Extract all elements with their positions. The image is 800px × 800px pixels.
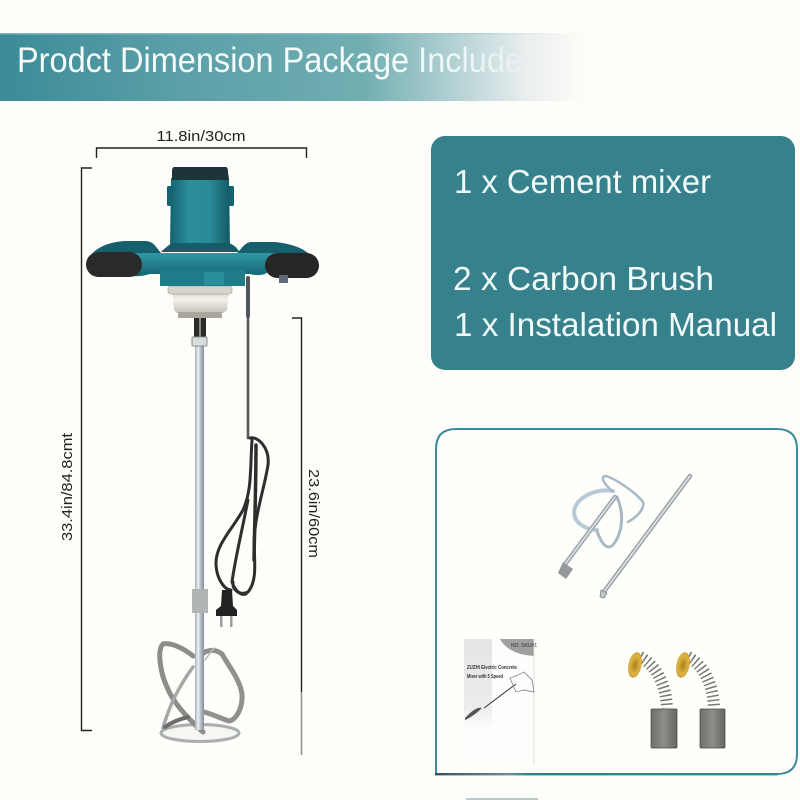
dimension: total height: 33.4in/84.8cmt [59, 432, 76, 541]
icon: instruction manual [464, 639, 537, 765]
panel: package list [431, 136, 795, 370]
lower collar [160, 270, 245, 286]
icon: instruction manual: ZUZHI Electric Concrete [467, 665, 517, 671]
icon: instruction manual: NO. SKU#1 [511, 643, 537, 649]
right handle [237, 242, 319, 283]
icon: instruction manual: Mixer with 5 Speed [467, 674, 503, 680]
icon: mixing paddle and shaft [558, 476, 690, 598]
steel shaft [192, 345, 208, 730]
dimension: shaft height [292, 318, 322, 755]
power cord [216, 278, 268, 594]
panel: included accessories [435, 429, 797, 775]
plug [216, 590, 237, 627]
motor housing [161, 167, 240, 252]
list item: cement mixer: 1 x Cement mixer [454, 164, 711, 201]
bottom edge strip [466, 798, 538, 800]
dimension: shaft height: 23.6in/60cm [305, 469, 322, 558]
title: Prodct Dimension Package Include [17, 41, 523, 80]
icon: carbon brush 2 [674, 651, 725, 748]
icon: carbon brush 1 [626, 651, 677, 748]
cement mixer product photo [86, 167, 319, 742]
dimension: width [96, 128, 306, 158]
dimension: width: 11.8in/30cm [156, 128, 246, 145]
mixing paddle [160, 644, 242, 742]
dimension: total height [59, 168, 92, 730]
chuck and gearbox [168, 286, 232, 346]
heading banner [0, 33, 585, 101]
left handle [86, 241, 275, 277]
list item: manual: 1 x Instalation Manual [454, 307, 777, 344]
list item: carbon brush: 2 x Carbon Brush [453, 261, 714, 298]
